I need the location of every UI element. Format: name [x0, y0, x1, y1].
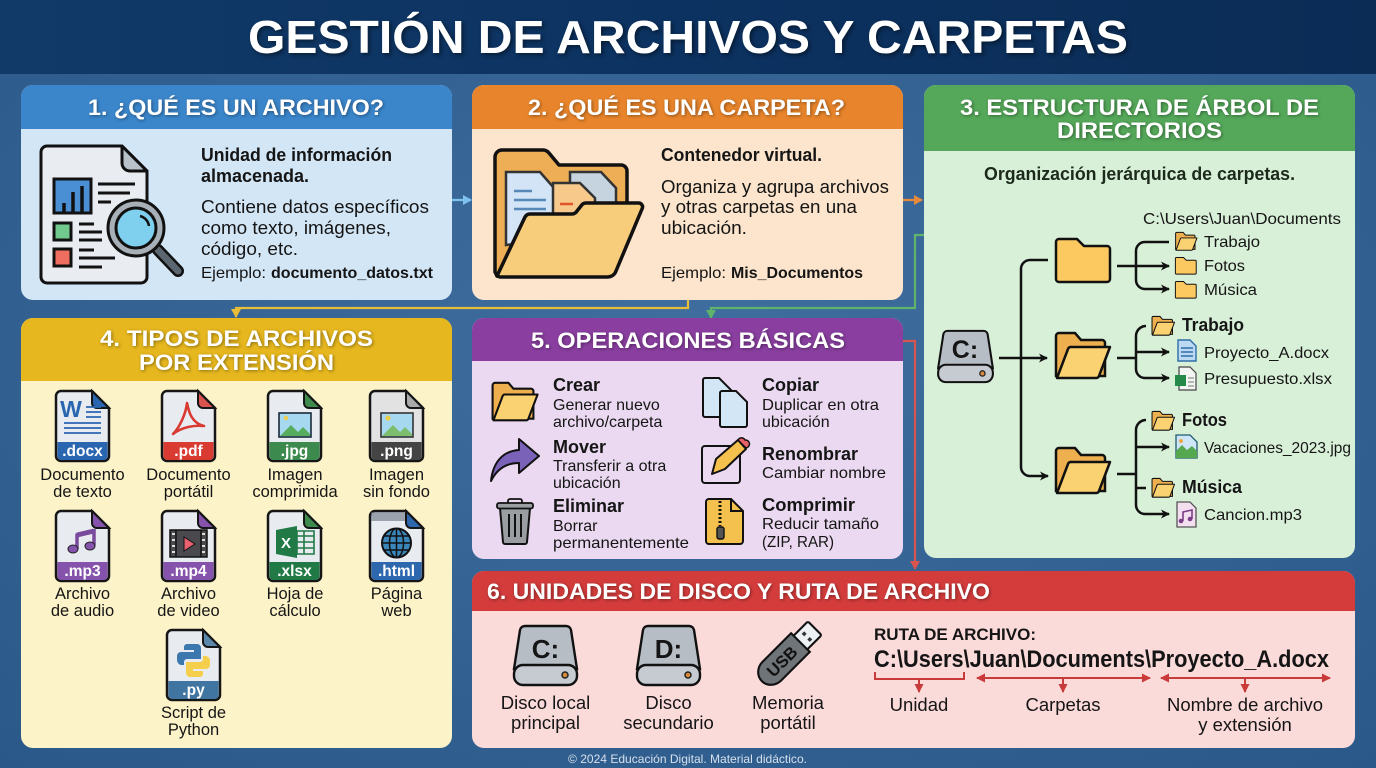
file type: jpg: [252, 391, 338, 501]
panel 1 description: como texto, imágenes,: [201, 218, 391, 238]
file type: py: [161, 630, 226, 739]
operation: renombrar: Cambiar nombre: [762, 465, 886, 482]
drive: disco secundario D: D:: [655, 634, 682, 664]
operation: crear: Generar nuevo: [553, 397, 660, 414]
path segment: unidad: [875, 672, 964, 715]
panel 1 description: Contiene datos específicos: [201, 197, 429, 217]
icon: root drive C: [938, 331, 993, 382]
panel 4 header: [21, 318, 452, 381]
group: música contents: Música: [1182, 477, 1243, 497]
group: documents folder contents: Fotos: [1204, 258, 1245, 275]
panel 1 header: [21, 85, 452, 129]
panel 6 heading: 6. UNIDADES DE DISCO Y RUTA DE ARCHIVO: [487, 579, 990, 604]
file type: pdf: .pdf: [174, 443, 204, 460]
drive: disco secundario D: secundario: [623, 712, 714, 733]
title: GESTIÓN DE ARCHIVOS Y CARPETAS: [248, 11, 1128, 63]
footer copyright: © 2024 Educación Digital. Material didáctico.: [568, 752, 807, 766]
group: fotos contents: [1152, 410, 1351, 458]
file type: xlsx: Hoja de: [267, 585, 323, 603]
panel: unidades de disco y ruta de archivo: [472, 571, 1355, 748]
operation: comprimir: (ZIP, RAR): [762, 534, 834, 551]
panel 3 header: [924, 85, 1355, 151]
file type: jpg: comprimida: [252, 483, 338, 501]
path segment: nombre de archivo: y extensión: [1198, 714, 1292, 735]
panel: qué es un archivo: [21, 85, 452, 300]
file type: png: sin fondo: [363, 483, 430, 501]
operation: copiar: Duplicar en otra: [762, 397, 879, 414]
file type: html: .html: [378, 563, 415, 580]
arrow: árbol to operaciones: [711, 235, 924, 318]
file type: mp3: .mp3: [64, 563, 101, 580]
group: documents folder contents: Música: [1204, 282, 1257, 299]
file type: xlsx: [267, 511, 323, 620]
group: fotos contents: Fotos: [1182, 410, 1227, 430]
icon: document with magnifier: [41, 146, 178, 283]
file type: py: Script de: [161, 704, 226, 722]
operation: crear: [493, 375, 662, 431]
panel 1 description: código, etc.: [201, 239, 298, 259]
panel: estructura de árbol de directorios: [924, 85, 1355, 558]
file type: jpg: Imagen: [267, 466, 323, 484]
panel 3 heading: [960, 95, 1319, 143]
operation: mover: ubicación: [553, 475, 621, 492]
file type: pdf: [146, 391, 231, 501]
file type: jpg: .jpg: [281, 443, 308, 460]
file path: C:\Users\Juan\Documents\Proyecto_A.docx: [874, 646, 1330, 673]
drive: disco local C: [501, 626, 590, 733]
drive: memoria USB: Memoria: [752, 692, 825, 713]
panel 1 definition: Unidad de información: [201, 145, 392, 165]
operation: renombrar: [702, 438, 886, 483]
panel: qué es una carpeta: [472, 85, 903, 300]
path segment: carpetas: Carpetas: [1025, 694, 1101, 715]
group: trabajo contents: Trabajo: [1182, 315, 1244, 335]
operation: crear: archivo/carpeta: [553, 414, 662, 431]
path segment: nombre de archivo: Nombre de archivo: [1167, 694, 1323, 715]
group: documents folder contents: [1175, 232, 1260, 299]
file type: html: web: [380, 602, 412, 620]
panel 3 heading: 3. ESTRUCTURA DE ÁRBOL DE: [960, 95, 1319, 120]
path segment: nombre de archivo: [1161, 678, 1330, 735]
panel 2 description: y otras carpetas en una: [661, 197, 858, 217]
icon: open folder: [1056, 333, 1110, 378]
icon: closed folder: [1056, 239, 1110, 282]
operation: eliminar: Eliminar: [553, 496, 624, 516]
panel 1 example: documento_datos.txt: [271, 265, 434, 282]
operation: comprimir: [706, 495, 879, 551]
icon: root drive C: C:: [952, 336, 978, 364]
panel 2 header: [472, 85, 903, 129]
file type: docx: W: [60, 396, 82, 422]
panel: operaciones básicas: [472, 318, 903, 559]
arrow: carpeta to tipos: [236, 300, 688, 317]
operation: mover: [491, 437, 666, 492]
panel 5 header: [472, 318, 903, 361]
file type: mp3: Archivo: [55, 585, 110, 603]
file type: docx: de texto: [53, 483, 112, 501]
panel 2 description: [661, 177, 889, 238]
panel 6 header: [472, 571, 1355, 611]
panel 3 heading: DIRECTORIOS: [1057, 118, 1222, 143]
operation: comprimir: Comprimir: [762, 495, 855, 515]
panel 1 example: [201, 265, 434, 282]
panel 3 subtitle: Organización jerárquica de carpetas.: [984, 164, 1295, 184]
group: música contents: Cancion.mp3: [1204, 507, 1302, 524]
arrow: archivo to carpeta: [452, 199, 471, 201]
file type: docx: .docx: [62, 443, 103, 460]
file type: png: [363, 391, 430, 501]
operation: eliminar: [497, 496, 689, 552]
panel 1 description: [201, 197, 429, 259]
panel 5 heading: 5. OPERACIONES BÁSICAS: [531, 328, 845, 353]
operation: copiar: [703, 375, 879, 431]
path label: C:\Users\Juan\Documents: [1143, 211, 1341, 228]
file type: pdf: Documento: [146, 466, 231, 484]
file type: mp4: .mp4: [170, 563, 207, 580]
file path heading: RUTA DE ARCHIVO:: [874, 625, 1036, 644]
path segment: unidad: Unidad: [890, 694, 948, 715]
drive: disco local C: principal: [511, 712, 580, 733]
arrow: carpeta to árbol: [903, 199, 922, 201]
group: documents folder contents: Trabajo: [1204, 234, 1260, 251]
drive: disco local C: Disco local: [501, 692, 590, 713]
operation: eliminar: permanentemente: [553, 535, 689, 552]
group: trabajo contents: Proyecto_A.docx: [1204, 345, 1329, 362]
operation: renombrar: Renombrar: [762, 444, 858, 464]
file type: html: [370, 511, 423, 620]
drive: disco secundario D: Disco: [645, 692, 692, 713]
title banner: [0, 0, 1376, 74]
panel 4 heading: 4. TIPOS DE ARCHIVOS: [100, 326, 373, 351]
icon: open folder bottom: [1056, 448, 1110, 493]
group: fotos contents: Vacaciones_2023.jpg: [1204, 440, 1351, 457]
drive: disco local C: C:: [532, 634, 559, 664]
panel 2 heading: 2. ¿QUÉ ES UNA CARPETA?: [528, 95, 845, 120]
arrow: operaciones to unidades: [903, 341, 915, 569]
file type: mp3: de audio: [51, 602, 114, 620]
panel: tipos de archivos por extensión: [21, 318, 452, 748]
tree connectors: [999, 242, 1169, 514]
drive: memoria USB: [752, 619, 825, 733]
group: trabajo contents: Presupuesto.xlsx: [1204, 371, 1332, 388]
panel 2 description: ubicación.: [661, 218, 747, 238]
file type: py: Python: [168, 721, 219, 739]
file type: pdf: portátil: [164, 483, 213, 501]
group: música contents: [1152, 477, 1302, 527]
group: trabajo contents: [1152, 315, 1332, 390]
drive: memoria USB: portátil: [760, 712, 816, 733]
panel 1 example: Ejemplo:: [201, 265, 266, 282]
drive: disco secundario D: [623, 626, 714, 733]
file type: xlsx: cálculo: [269, 602, 321, 620]
panel 2 example: [661, 265, 863, 282]
file type: mp4: de video: [157, 602, 220, 620]
file type: xlsx: X: [281, 535, 291, 552]
file type: docx: Documento: [40, 466, 125, 484]
operation: copiar: ubicación: [762, 414, 830, 431]
panel 2 definition: Contenedor virtual.: [661, 145, 822, 165]
operation: crear: Crear: [553, 375, 600, 395]
drive: memoria USB: USB: [763, 642, 801, 681]
operation: copiar: Copiar: [762, 375, 819, 395]
operation: mover: Mover: [553, 437, 606, 457]
file type: xlsx: .xlsx: [277, 563, 312, 580]
operation: mover: Transferir a otra: [553, 458, 666, 475]
panel 1 definition line 2: almacenada.: [201, 166, 309, 186]
operation: comprimir: Reducir tamaño: [762, 516, 879, 533]
panel 2 example: Ejemplo:: [661, 265, 726, 282]
panel 2 example: Mis_Documentos: [731, 265, 863, 282]
file type: py: .py: [182, 682, 205, 699]
panel 1 heading: 1. ¿QUÉ ES UN ARCHIVO?: [88, 95, 384, 120]
file type: mp3: [51, 511, 114, 620]
file type: png: Imagen: [369, 466, 424, 484]
panel 4 heading: POR EXTENSIÓN: [139, 350, 334, 375]
file type: mp4: Archivo: [161, 585, 216, 603]
file type: mp4: [157, 511, 220, 620]
icon: open folder with documents: [495, 150, 643, 277]
file type: png: .png: [380, 443, 413, 460]
file type: docx: [40, 391, 125, 501]
operation: eliminar: Borrar: [553, 518, 598, 535]
panel 4 heading: [100, 326, 373, 375]
file type: html: Página: [371, 585, 423, 603]
panel 2 description: Organiza y agrupa archivos: [661, 177, 889, 197]
